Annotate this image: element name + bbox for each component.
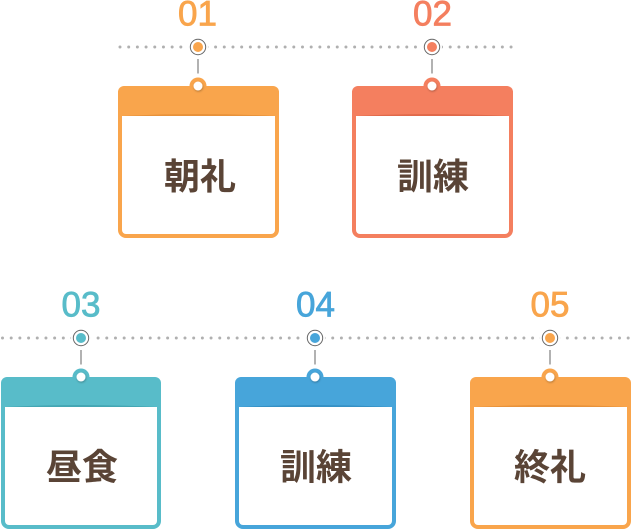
timeline marker 02 bbox=[422, 37, 442, 57]
card 03 bbox=[1, 368, 161, 527]
step 02: 訓練 bbox=[352, 0, 513, 236]
label 終礼: 終礼 bbox=[514, 446, 586, 488]
step 05: 終礼 bbox=[470, 286, 631, 527]
label 昼食: 昼食 bbox=[46, 446, 118, 488]
card 02 bbox=[352, 78, 513, 236]
number 05: 05 bbox=[531, 286, 569, 324]
dotted timeline: bottom row bbox=[2, 336, 631, 340]
connector 01 bbox=[197, 59, 199, 74]
timeline marker 04 bbox=[305, 328, 325, 348]
step 03: 昼食 bbox=[1, 286, 161, 527]
card 04 bbox=[235, 368, 396, 527]
number 03: 03 bbox=[62, 286, 100, 324]
connector 04 bbox=[314, 350, 316, 364]
label 訓練: 訓練 bbox=[397, 156, 469, 197]
step 04: 訓練 bbox=[235, 286, 396, 527]
step 01: 朝礼 bbox=[118, 0, 279, 236]
connector 03 bbox=[80, 350, 82, 364]
dotted timeline: top row bbox=[120, 46, 512, 48]
label 朝礼: 朝礼 bbox=[164, 156, 236, 197]
label 訓練: 訓練 bbox=[280, 446, 352, 488]
number 04: 04 bbox=[296, 286, 335, 324]
connector 02 bbox=[431, 59, 433, 74]
card 01 bbox=[118, 78, 279, 236]
connector 05 bbox=[549, 350, 551, 364]
timeline marker 03 bbox=[71, 328, 91, 348]
card 05 bbox=[470, 368, 631, 527]
timeline marker 01 bbox=[188, 37, 208, 57]
timeline marker 05 bbox=[540, 328, 560, 348]
